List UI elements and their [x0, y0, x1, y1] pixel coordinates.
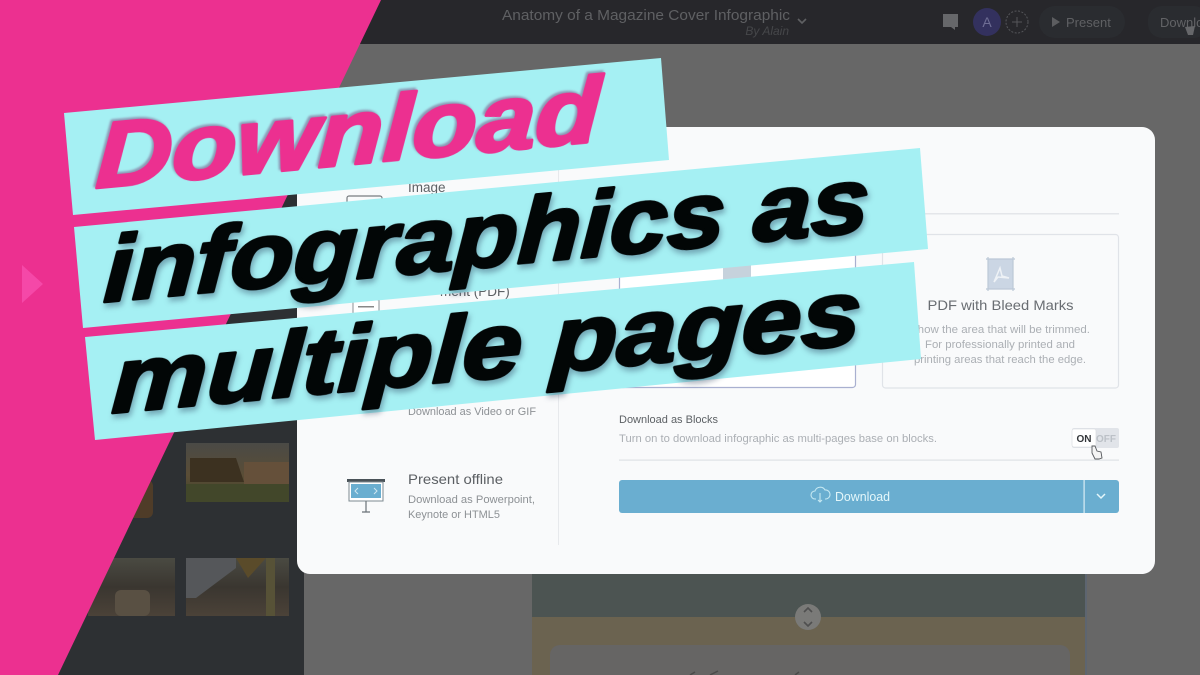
download button	[619, 480, 1119, 513]
rule above button	[619, 460, 1119, 461]
icon: projector screen	[347, 479, 385, 512]
download as blocks description: Turn on to download infographic as multi-pages base on blocks.	[619, 433, 937, 445]
banner: download	[64, 57, 669, 215]
present button	[1039, 6, 1125, 38]
left sidebar	[0, 44, 304, 675]
option: image: Image	[408, 180, 446, 195]
avatar	[973, 8, 1001, 36]
option: present offline	[347, 471, 535, 521]
icon: hand cursor	[1185, 26, 1195, 35]
download as blocks heading: Download as Blocks	[619, 414, 718, 426]
banner: download: Download	[94, 57, 606, 208]
icon: comment	[943, 14, 958, 30]
card: selected pdf	[620, 234, 856, 388]
option: pdf: ment (PDF)	[440, 284, 510, 299]
card: pdf with bleed marks: PDF with Bleed Marks	[928, 297, 1074, 313]
sidebar thumbnail: lounge	[88, 558, 175, 616]
banner: multiple pages: multiple pages	[110, 259, 864, 433]
card: pdf with bleed marks: Show the area that will be trimmed.	[910, 324, 1090, 336]
banner: infographics as: infographics as	[102, 147, 872, 322]
top bar	[0, 0, 1200, 44]
icon: add collaborator	[1006, 11, 1028, 33]
toggle: on/off: OFF	[1096, 434, 1116, 445]
download button: Download	[835, 490, 890, 504]
download modal	[297, 127, 1155, 574]
toggle: on/off: ON	[1076, 434, 1092, 445]
document title: Anatomy of a Magazine Cover Infographic	[502, 8, 790, 24]
option: video: Download as Video or GIF	[408, 406, 536, 418]
title chevron	[798, 19, 806, 23]
infographic canvas behind modal	[532, 560, 1087, 675]
present button: Present	[1066, 15, 1111, 30]
icon: hand cursor	[1092, 446, 1102, 459]
sidebar thumbnail: atrium	[186, 558, 289, 616]
panel divider	[558, 160, 559, 545]
card: pdf with bleed marks: For professionally printed and	[925, 339, 1075, 351]
sidebar thumbnail: building	[186, 443, 289, 502]
author: By Alain	[745, 24, 789, 38]
icon: chevron	[1097, 494, 1105, 498]
download button	[1148, 6, 1200, 38]
icon: bleed marks pdf	[986, 257, 1015, 291]
icon: sidebar arrow	[22, 265, 43, 303]
option: present offline: Download as Powerpoint,	[408, 494, 535, 506]
sidebar thumbnail: partial	[128, 480, 153, 518]
option: image	[347, 180, 446, 220]
avatar: A	[982, 14, 992, 30]
pink diagonal panel	[0, 0, 381, 675]
option: pdf	[353, 284, 510, 322]
header rule	[600, 213, 1119, 214]
card: pdf with bleed marks	[882, 234, 1118, 388]
toggle: on/off	[1072, 428, 1119, 448]
icon: cloud download	[811, 487, 830, 502]
card: pdf with bleed marks: printing areas that reach the edge.	[914, 354, 1086, 366]
option: present offline: Keynote or HTML5	[408, 509, 500, 521]
option: present offline: Present offline	[408, 471, 503, 487]
